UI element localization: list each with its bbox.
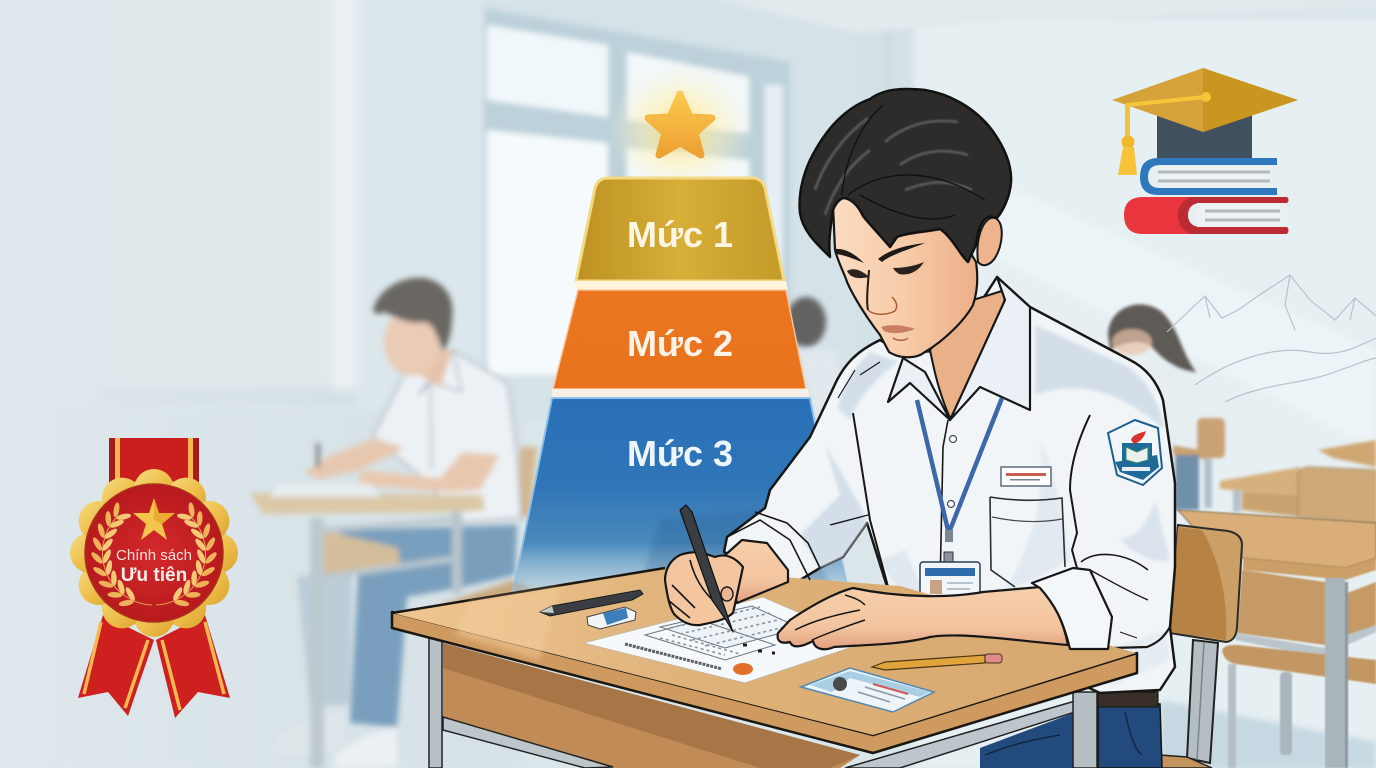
gold seal (70, 469, 238, 637)
blurred student on the left (250, 278, 537, 768)
chair seat (440, 580, 535, 612)
cap base (1157, 115, 1252, 160)
lanyard and ID card (917, 398, 1002, 600)
band between levels 1 and 2 (574, 281, 788, 290)
shirt shadows (800, 325, 1170, 688)
trousers and belt (980, 692, 1162, 768)
desk (250, 493, 485, 514)
student (724, 89, 1175, 768)
level 1: Mức 1 (627, 214, 733, 255)
blurred student in the middle (786, 297, 850, 420)
level 2 (553, 290, 806, 389)
chair back (520, 447, 537, 517)
medal text (116, 547, 192, 586)
ear (977, 218, 1002, 265)
neck and head (415, 350, 453, 388)
rear leg (297, 570, 352, 705)
red book (1124, 197, 1288, 234)
level 1 (576, 178, 784, 281)
ID card on desk (801, 668, 934, 712)
hair strand lines (842, 105, 985, 219)
rolled cuff line (727, 512, 820, 580)
shirt (724, 277, 1175, 693)
blue book (1140, 158, 1277, 195)
desk frame and apron (429, 638, 1097, 768)
desk frame (310, 518, 324, 768)
pen (316, 443, 320, 468)
shirt (373, 350, 521, 522)
level 3 (513, 397, 848, 592)
hair highlights (815, 118, 972, 215)
facial features (835, 243, 925, 340)
pen on desk (540, 590, 643, 616)
arm and hand resting on paper (778, 587, 1068, 649)
wreath (89, 500, 219, 612)
school badge on sleeve (1108, 420, 1162, 485)
pen in hand (680, 505, 733, 632)
star with glow (608, 64, 752, 196)
medal text: Chính sách (116, 547, 192, 564)
medal text: Ưu tiên (121, 565, 187, 586)
mountain line art (1167, 275, 1376, 402)
arms (305, 438, 405, 480)
pencil (872, 654, 1002, 670)
collar (888, 277, 1030, 420)
eraser (587, 607, 636, 629)
blurred students and desks on the right (786, 297, 1376, 768)
answer sheet (583, 597, 867, 683)
faint figure inside level 3 (645, 510, 830, 585)
pyramid of levels (513, 64, 848, 592)
chair behind student (1160, 525, 1242, 768)
band between levels 2 and 3 (552, 389, 810, 397)
mortarboard (1112, 68, 1298, 175)
trousers (338, 525, 517, 727)
writing arm and hand (665, 505, 820, 632)
desk apron (323, 530, 400, 575)
desk top (392, 568, 1137, 753)
shoes (272, 712, 345, 755)
level 3: Mức 3 (627, 433, 733, 474)
far chair (1222, 645, 1376, 684)
neck (930, 290, 1005, 418)
medal star (133, 498, 175, 540)
pocket and name tag (990, 467, 1065, 587)
foreground right desk (1178, 510, 1376, 768)
face (833, 190, 977, 357)
blurred girl and far desks (1108, 304, 1376, 525)
level 2: Mức 2 (627, 323, 733, 364)
shirt fold lines and sleeve seam (830, 362, 1170, 648)
medal: Chính sách Ưu tiên (70, 438, 238, 718)
shirt buttons (948, 436, 956, 508)
ribbon tails (78, 615, 230, 718)
cuff of right sleeve (1032, 568, 1112, 649)
graduation cap and books (1112, 68, 1298, 234)
hair (800, 89, 1011, 262)
top ribbon (109, 438, 199, 498)
items on desk (540, 590, 1002, 712)
red disc (85, 484, 223, 622)
